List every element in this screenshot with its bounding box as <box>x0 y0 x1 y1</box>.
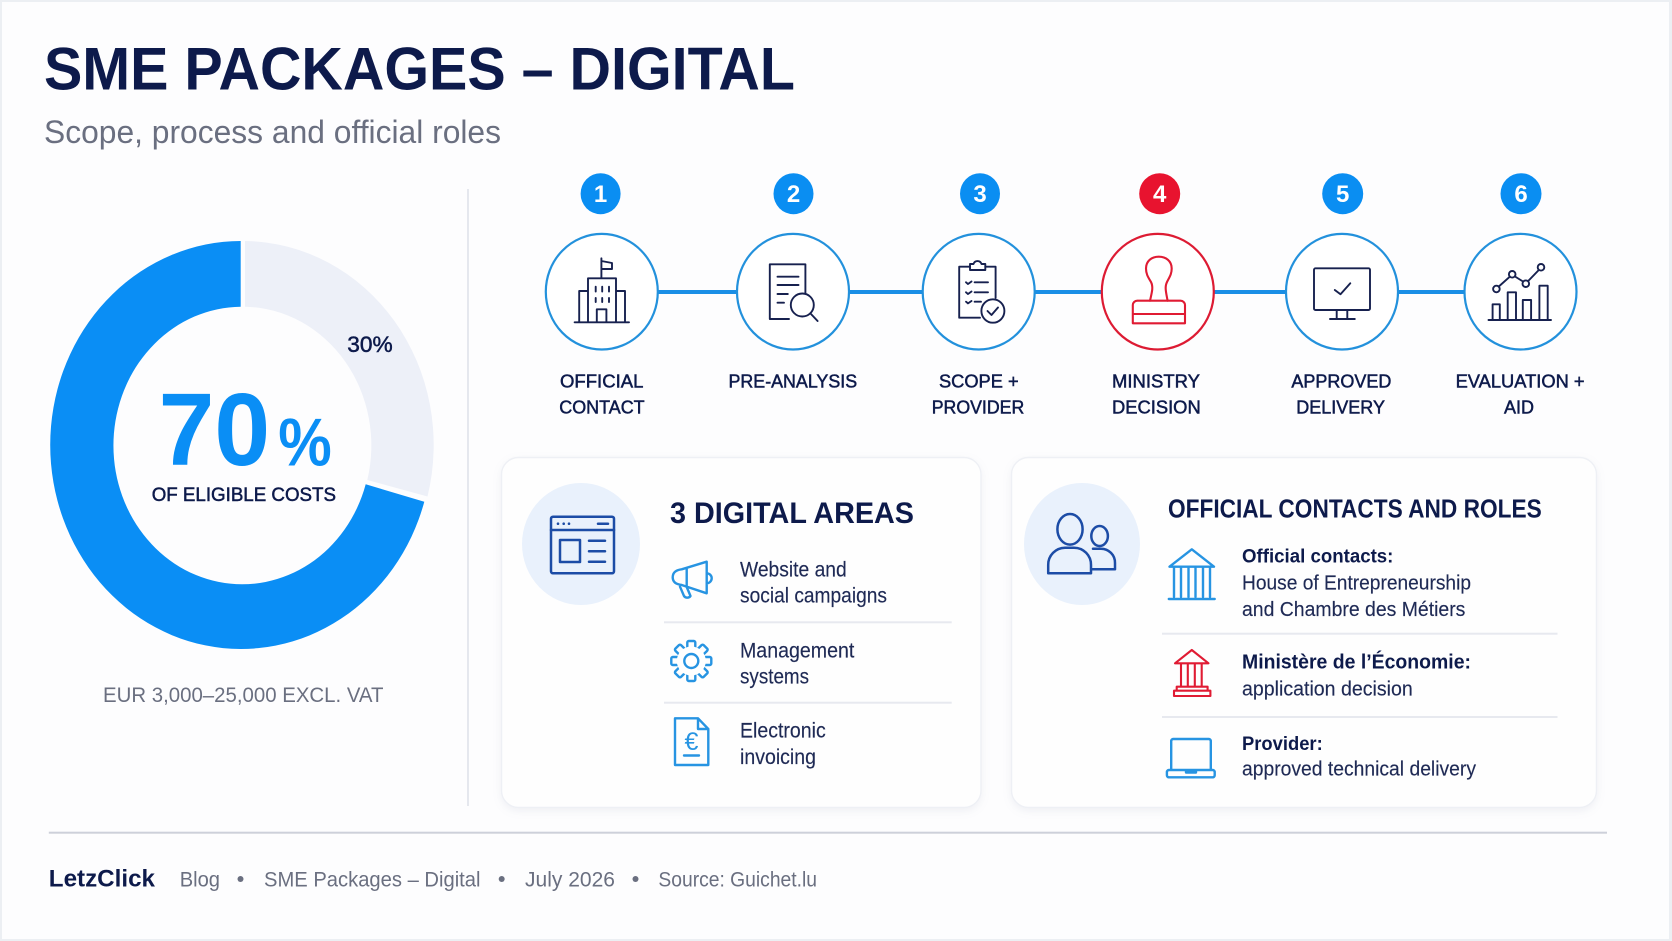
icon: red ministry building <box>1174 650 1210 696</box>
panel: official contacts and roles <box>1012 458 1596 808</box>
text: management systems: Management <box>740 639 854 662</box>
step 2: pre-analysis <box>728 173 857 391</box>
budget range caption: EUR 3,000–25,000 EXCL. VAT <box>103 684 384 707</box>
process connector line <box>658 290 1466 294</box>
step 3: scope + provider <box>923 173 1035 418</box>
text: management systems <box>740 639 854 688</box>
text: electronic invoicing: Electronic <box>740 719 826 742</box>
icon: euro invoice: € <box>685 728 699 756</box>
step 1: official contact <box>546 173 658 418</box>
icon: bar chart with trend line <box>1488 264 1551 320</box>
text: website and social campaigns: social campaigns <box>740 585 887 608</box>
step 3: scope + provider: 3 <box>973 181 987 208</box>
icon: blue institution <box>1169 549 1215 599</box>
footer credits: SME Packages – Digital <box>264 868 480 892</box>
text: official contacts: Official contacts: <box>1242 546 1393 568</box>
text: official contacts: House of Entrepreneurship <box>1242 571 1471 594</box>
heading: official contacts and roles: OFFICIAL CONTACTS AND ROLES <box>1168 495 1542 523</box>
icon: people <box>1024 483 1140 605</box>
footer <box>49 866 817 893</box>
footer credits: July 2026 <box>525 868 615 892</box>
step 1: official contact: 1 <box>594 181 607 208</box>
icon: monitor with check <box>1314 268 1370 319</box>
donut chart: 70% of eligible costs: 70 <box>159 372 270 487</box>
text: ministère de l'économie: application decision <box>1242 678 1413 701</box>
text: official contacts: and Chambre des Métiers <box>1242 598 1465 621</box>
step 3: scope + provider: PROVIDER <box>932 397 1024 418</box>
heading: 3 digital areas: 3 DIGITAL AREAS <box>670 497 914 530</box>
text: provider <box>1242 733 1477 780</box>
footer credits: Blog <box>180 868 220 892</box>
text: provider: Provider: <box>1242 733 1323 755</box>
icon: clipboard with check <box>959 261 1004 323</box>
footer credits <box>180 868 817 892</box>
step 4: ministry decision: MINISTRY <box>1112 370 1200 391</box>
icon: megaphone <box>673 562 712 598</box>
footer credits: Source: Guichet.lu <box>658 868 817 892</box>
step 2: pre-analysis: 2 <box>787 181 800 208</box>
step 6: evaluation + aid <box>1456 173 1585 418</box>
donut chart: 70% of eligible costs: OF ELIGIBLE COSTS <box>152 485 336 506</box>
donut chart: 70% of eligible costs: % <box>278 404 332 480</box>
donut chart: 70% of eligible costs <box>50 241 434 649</box>
step 4: ministry decision <box>1102 173 1214 418</box>
step 6: evaluation + aid: 6 <box>1514 181 1528 208</box>
text: provider: approved technical delivery <box>1242 757 1477 780</box>
step 5: approved delivery: APPROVED <box>1291 370 1391 391</box>
step 6: evaluation + aid: AID <box>1504 397 1534 418</box>
step 5: approved delivery: 5 <box>1336 181 1349 208</box>
icon: browser window <box>522 483 640 605</box>
step 4: ministry decision: DECISION <box>1112 397 1201 418</box>
step 5: approved delivery <box>1286 173 1398 418</box>
text: website and social campaigns <box>740 559 887 608</box>
step 6: evaluation + aid: EVALUATION + <box>1456 370 1585 391</box>
donut chart: 70% of eligible costs: 30% <box>347 332 393 357</box>
title: SME PACKAGES – DIGITAL <box>44 36 795 102</box>
step 5: approved delivery: DELIVERY <box>1296 397 1385 418</box>
text: website and social campaigns: Website and <box>740 559 847 582</box>
icon: laptop <box>1167 739 1215 777</box>
text: ministère de l'économie <box>1242 650 1471 701</box>
step 3: scope + provider: SCOPE + <box>939 370 1019 391</box>
icon: document with magnifier <box>770 264 818 321</box>
text: electronic invoicing: invoicing <box>740 746 816 769</box>
text: electronic invoicing <box>740 719 826 769</box>
subtitle: Scope, process and official roles <box>44 114 501 150</box>
text: management systems: systems <box>740 665 809 688</box>
text: official contacts <box>1242 546 1471 621</box>
step 1: official contact: OFFICIAL <box>560 370 643 391</box>
brand: letzclick: LetzClick <box>49 866 156 893</box>
step 1: official contact: CONTACT <box>559 397 645 418</box>
panel: 3 digital areas <box>502 458 981 808</box>
step 4: ministry decision: 4 <box>1153 181 1167 208</box>
icon: building with flag <box>575 258 629 322</box>
icon: euro invoice <box>675 718 708 765</box>
step 2: pre-analysis: PRE-ANALYSIS <box>728 370 857 391</box>
icon: gear <box>671 641 711 681</box>
text: ministère de l'économie: Ministère de l’Économie: <box>1242 650 1471 673</box>
icon: stamp <box>1133 257 1185 323</box>
